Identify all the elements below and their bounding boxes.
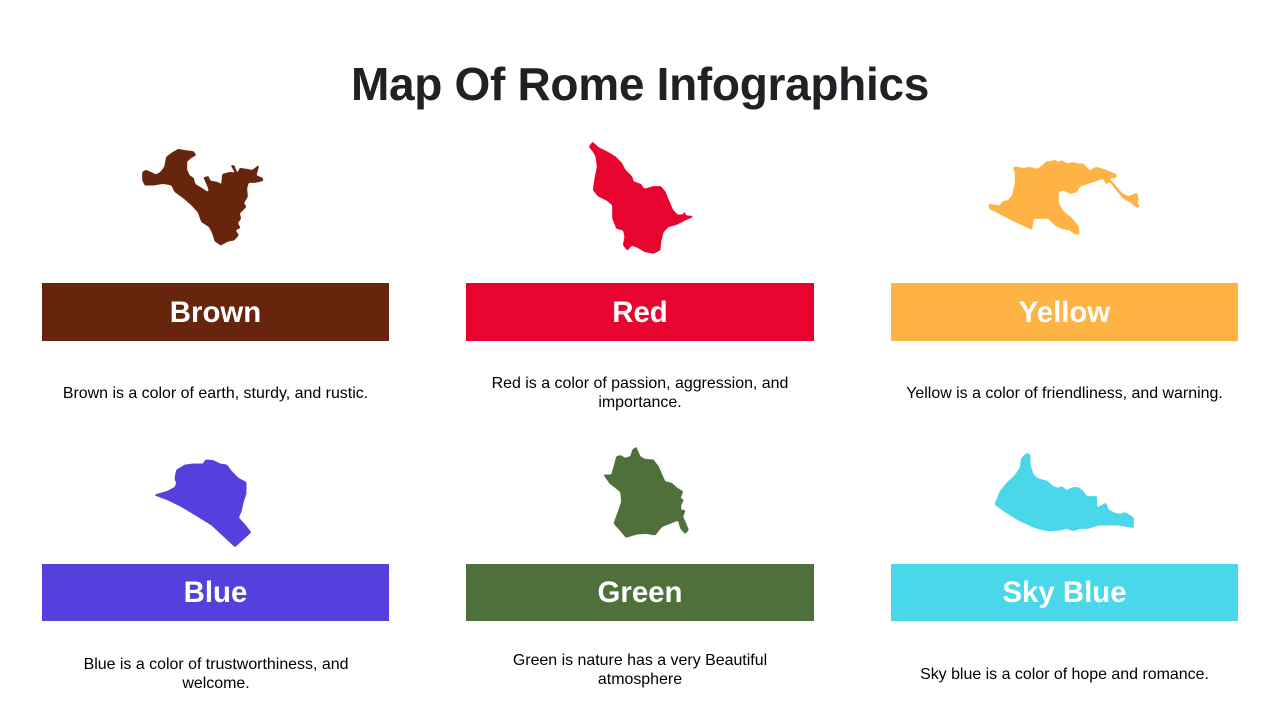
heading bar: Blue: Blue [184, 576, 247, 609]
icon: blue map [155, 460, 251, 547]
heading bar: Sky Blue: Sky Blue [1002, 576, 1127, 609]
heading bar: Brown: Brown [170, 296, 261, 329]
heading bar: Green: Green [598, 576, 682, 609]
icon: brown map [143, 149, 263, 245]
heading bar: Green [466, 564, 814, 621]
icon: sky blue map [995, 453, 1133, 531]
heading bar: Blue [42, 564, 389, 621]
heading bar: Brown [42, 283, 389, 341]
text: Brown: Brown is a color of earth, sturdy, and rustic. [63, 384, 368, 402]
icon: green map [604, 447, 688, 537]
text: Red: Red is a color of passion, aggression, and importance. [492, 375, 788, 411]
heading bar: Sky Blue [891, 564, 1238, 621]
text: Yellow: Yellow is a color of friendliness, and warning. [906, 384, 1223, 402]
heading bar: Yellow [891, 283, 1238, 341]
title: Map Of Rome Infographics [351, 58, 929, 110]
heading bar: Red: Red [612, 296, 668, 329]
icon: red map [589, 142, 693, 253]
icon: yellow map [989, 160, 1139, 234]
text: Blue: Blue is a color of trustworthiness, and welcome. [84, 656, 348, 692]
heading bar: Yellow: Yellow [1019, 296, 1110, 329]
heading bar: Red [466, 283, 814, 341]
text: Sky Blue: Sky blue is a color of hope and romance. [920, 666, 1209, 682]
text: Green: Green is nature has a very Beautiful atmosphere [513, 652, 767, 688]
